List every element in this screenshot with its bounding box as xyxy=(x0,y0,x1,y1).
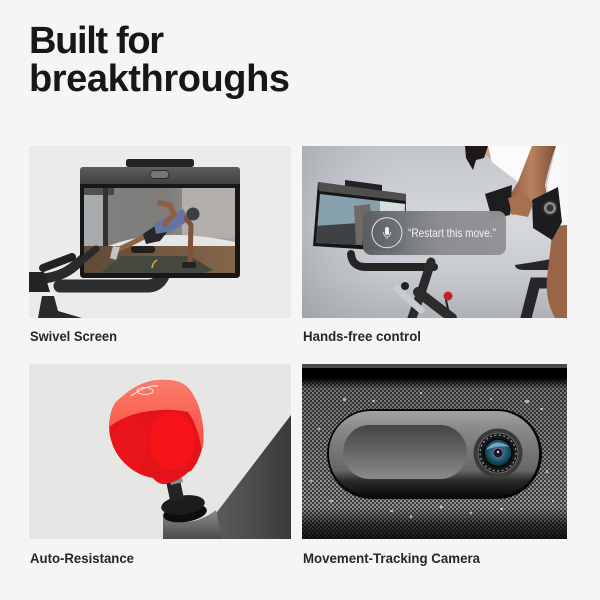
coral top face xyxy=(109,380,204,450)
center dimple xyxy=(149,412,195,470)
icon: bottle clamp xyxy=(401,282,409,290)
icon: saddle xyxy=(515,259,551,270)
title: breakthroughs xyxy=(29,58,290,100)
title xyxy=(29,20,290,100)
camera housing xyxy=(327,409,542,499)
caption: movement-tracking camera: Movement-Tracking Camera xyxy=(303,551,480,566)
panel: swivel screen xyxy=(29,146,291,318)
voice command bubble xyxy=(363,211,506,255)
fabric soundbar xyxy=(80,167,240,184)
tablet body xyxy=(80,167,240,278)
icon: camera mount xyxy=(126,159,194,167)
icon: dumbbell xyxy=(485,185,562,240)
icon: camera lens xyxy=(474,428,522,478)
fabric speckle xyxy=(310,392,554,518)
panel: movement-tracking camera xyxy=(302,364,567,539)
title: Built for xyxy=(29,20,164,62)
caption: hands-free control: Hands-free control xyxy=(303,329,421,344)
left dimple xyxy=(112,443,136,472)
person: torso and arms xyxy=(465,146,567,318)
voice command text: “Restart this move.” xyxy=(408,226,496,240)
tablet on bike xyxy=(313,180,410,252)
icon: bike frame xyxy=(351,254,546,318)
bike frame post xyxy=(216,415,291,539)
hair xyxy=(465,146,488,170)
handlebar grip in front of tablet xyxy=(80,246,100,266)
screen: workout video xyxy=(84,188,235,273)
caption: swivel screen: Swivel Screen xyxy=(30,329,117,344)
knob collar xyxy=(160,478,222,539)
athlete xyxy=(110,203,200,268)
panel: hands-free control xyxy=(302,146,567,318)
red resistance knob xyxy=(105,376,207,484)
privacy shutter recess xyxy=(343,425,467,479)
icon: microphone xyxy=(372,218,402,248)
panel: auto-resistance xyxy=(29,364,291,539)
camera pill xyxy=(150,170,169,178)
icon: red knob xyxy=(444,292,452,300)
icon: handlebar and bike stem xyxy=(29,250,163,318)
caption: auto-resistance: Auto-Resistance xyxy=(30,551,134,566)
